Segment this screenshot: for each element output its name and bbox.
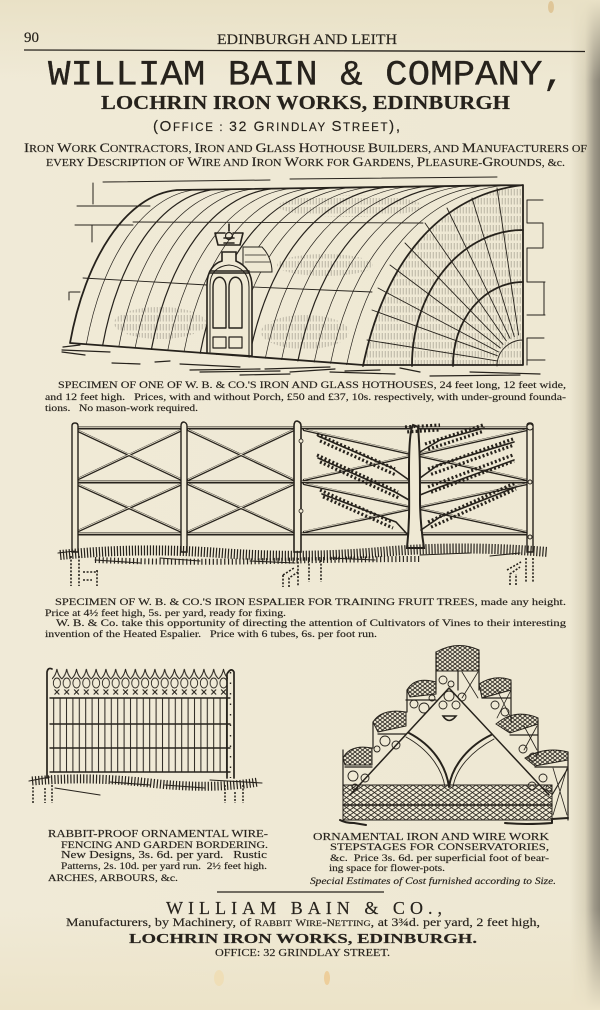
vertical wires [52, 698, 228, 772]
title block [24, 56, 588, 169]
caption prices one: New Designs, 3s. 6d. per yard. Rustic [61, 850, 267, 861]
engraving: iron espalier with fruit tree [58, 421, 548, 587]
caption prices two: Patterns, 2s. 10d. per yard run. 2½ feet high. [61, 861, 267, 872]
side lattice panels [462, 672, 567, 815]
arches note: ARCHES, ARBOURS, &c. [48, 873, 178, 884]
office address: (OFFICE : 32 GRINDLAY STREET), [153, 118, 400, 135]
mesh baskets [343, 645, 568, 766]
engraving: ornamental wire stepstage [340, 645, 568, 825]
espalier rails [74, 428, 530, 534]
foliage [317, 425, 516, 528]
running title: EDINBURGH AND LEITH [217, 32, 398, 48]
caption line four: invention of the Heated Espalier. Price with 6 tubes, 6s. per foot run. [45, 629, 377, 640]
estimates note: Special Estimates of Cost furnished according to Size. [310, 876, 556, 887]
brick wall lines [69, 177, 545, 365]
porch crown [215, 224, 243, 245]
caption price one: &c. Price 3s. 6d. per superficial foot of bear- [330, 853, 549, 864]
caption line three: W. B. & Co. take this opportunity of directing the attention of Cultivators of Vines to their interesting [56, 618, 566, 629]
pointed arches [409, 733, 491, 787]
caption line two: and 12 feet high. Prices, with and without Porch, £50 and £37, 10s. respectively, with under-ground founda- [45, 392, 566, 403]
caption heading one: RABBIT-PROOF ORNAMENTAL WIRE- [48, 829, 269, 840]
fence footings [33, 785, 243, 803]
feet [340, 818, 568, 825]
stepped frame [343, 652, 568, 820]
fence grass [32, 779, 258, 786]
footer works address: LOCHRIN IRON WORKS, EDINBURGH. [129, 932, 477, 947]
description line two: EVERY DESCRIPTION OF WIRE AND IRON WORK FOR GARDENS, PLEASURE- GROUNDS, &c. [46, 154, 565, 169]
footer company name: WILLIAM BAIN & CO., [166, 898, 442, 918]
page number: 90 [24, 30, 39, 46]
caption line one: SPECIMEN OF W. B. & CO.'S IRON ESPALIER FOR TRAINING FRUIT TREES, made any height. [55, 597, 566, 608]
hothouse caption [45, 380, 566, 414]
foreground scribble [62, 345, 540, 376]
works address: LOCHRIN IRON WORKS, EDINBURGH [101, 92, 510, 114]
stepstage caption [310, 832, 556, 887]
ornamental top scallops [52, 668, 228, 696]
running header [24, 30, 398, 48]
caption heading two: STEPSTAGES FOR CONSERVATORIES, [330, 842, 549, 853]
post footings [71, 556, 533, 587]
house outline [70, 185, 523, 366]
fence posts [47, 668, 234, 778]
caption line three: tions. No mason-work required. [45, 403, 198, 414]
caption price two: ing space for flower-pots. [329, 863, 445, 874]
caption line one: SPECIMEN OF ONE OF W. B. & CO.'S IRON AND GLASS HOTHOUSES, 24 feet long, 12 feet wide, [58, 380, 566, 391]
footer manufacturing line: Manufacturers, by Machinery, of RABBIT WIRE-NETTING , at 3¾d. per yard, 2 feet high, [66, 915, 540, 929]
glass shading [114, 185, 523, 366]
lower tie rods [83, 222, 423, 292]
espalier caption [45, 597, 566, 640]
caption heading two: FENCING AND GARDEN BORDERING. [61, 840, 268, 851]
engraving: rabbit-proof wire fence [29, 668, 262, 803]
description line one: IRON WORK CONTRACTORS, IRON AND GLASS HOTHOUSE BUILDERS, AND MANUFACTURERS OF [24, 140, 588, 155]
trained fruit tree [317, 425, 516, 548]
espalier posts [72, 421, 533, 552]
ground grass [58, 548, 548, 563]
company name: WILLIAM BAIN & COMPANY, [48, 56, 565, 96]
fence caption [48, 829, 269, 884]
footer office address: OFFICE: 32 GRINDLAY STREET. [215, 948, 390, 959]
caption line two: Price at 4½ feet high, 5s. per yard, ready for fixing. [45, 608, 286, 619]
fan end spokes [367, 188, 519, 361]
horizontal rails [50, 698, 230, 772]
triangle struts [350, 688, 549, 795]
footer company block [66, 898, 540, 959]
fan end arcs [412, 230, 523, 366]
engraving: iron and glass hothouse [62, 177, 545, 376]
mesh base [343, 785, 552, 820]
caption heading one: ORNAMENTAL IRON AND WIRE WORK [313, 832, 550, 843]
roof ribs [86, 185, 504, 365]
porch door [207, 252, 252, 356]
porch roof [243, 247, 272, 272]
scroll work [348, 676, 552, 791]
